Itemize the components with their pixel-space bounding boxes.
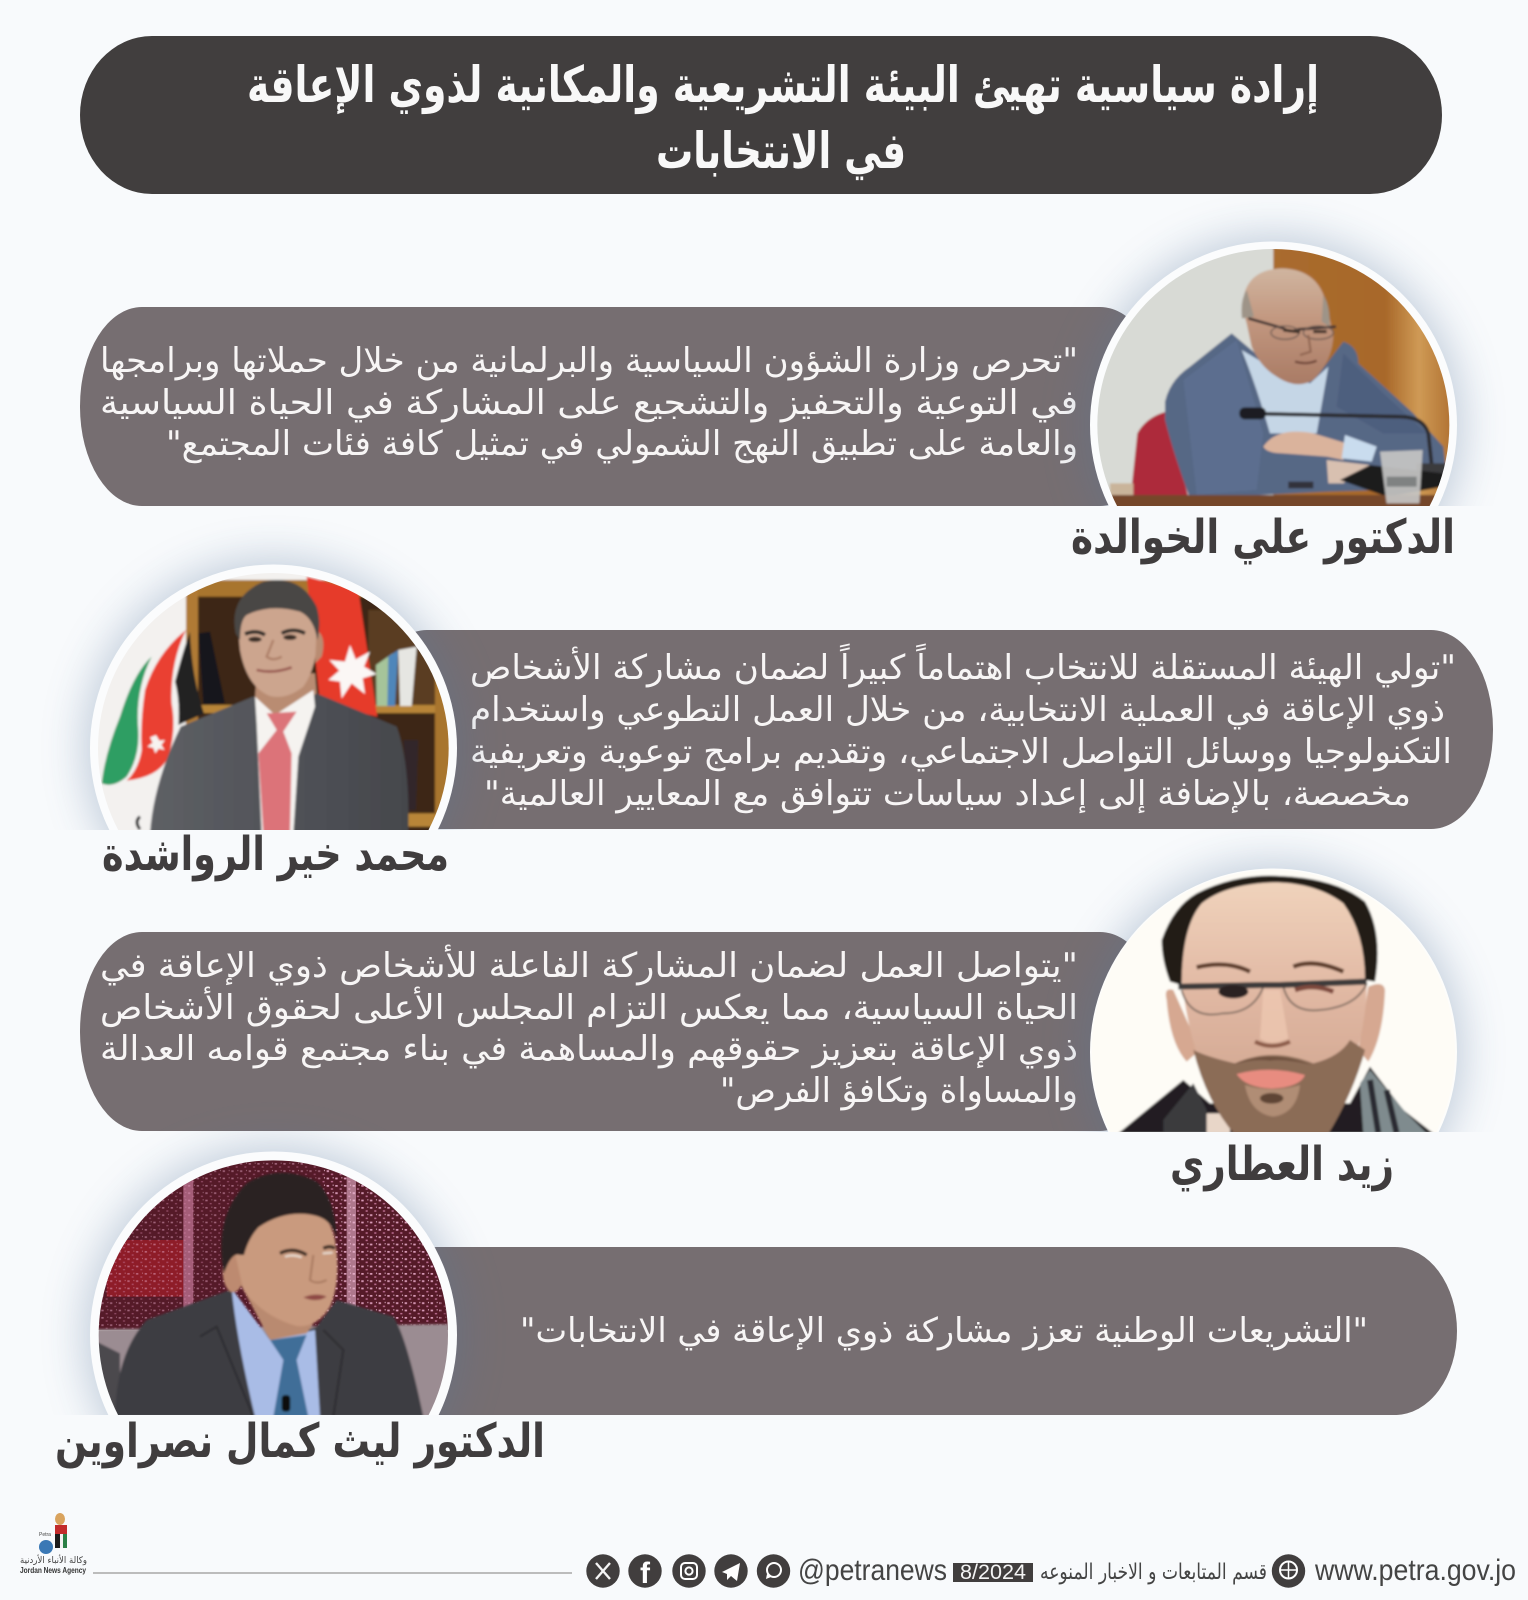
logo: Petra Jordan News Agency: وكالة الأنباء الأردنية [20, 1554, 87, 1566]
name 2: محمد خير الرواشدة [102, 827, 449, 882]
logo: Petra Jordan News Agency: Petra [39, 1532, 51, 1538]
icon: WhatsApp [757, 1554, 790, 1588]
quote text 1: "تحرص وزارة الشؤون السياسية والبرلمانية من خلال حملاتها وبرامجها [100, 341, 1078, 381]
footer rule [93, 1572, 572, 1574]
quote text 1: في التوعية والتحفيز والتشجيع على المشاركة في الحياة السياسية [100, 383, 1078, 423]
quote text 4: "التشريعات الوطنية تعزز مشاركة ذوي الإعاقة في الانتخابات" [520, 1311, 1368, 1351]
quote text 2: مخصصة، بالإضافة إلى إعداد سياسات تتوافق مع المعايير العالمية" [484, 774, 1411, 814]
quote text 3: الحياة السياسية، مما يعكس التزام المجلس الأعلى لحقوق الأشخاص [100, 986, 1078, 1028]
quote bubble 4 [375, 1247, 1457, 1415]
logo: Petra Jordan News Agency: Jordan News Agency [20, 1566, 86, 1575]
social handle: @petranews [798, 1554, 947, 1587]
title text [247, 56, 1319, 180]
panel: quote Mohammad Khair Rawashdeh [86, 560, 1493, 936]
date badge: 8/2024 [960, 1561, 1026, 1584]
quote bubble 2 [365, 630, 1493, 829]
panel: quote Laith Nasrawin [57, 1131, 1457, 1468]
quote text 2: ذوي الإعاقة في العملية الانتخابية، من خلال العمل التطوعي واستخدام [470, 690, 1445, 730]
panel: quote Zaid Al-Attari [80, 864, 1463, 1240]
icon: Facebook [628, 1554, 662, 1590]
footer [20, 1513, 1516, 1590]
quote text 3: "يتواصل العمل لضمان المشاركة الفاعلة للأشخاص ذوي الإعاقة في [100, 944, 1078, 986]
portrait 2 [64, 538, 484, 830]
quote text 2: التكنولوجيا ووسائل التواصل الاجتماعي، وتقديم برامج توعوية وتعريفية [470, 732, 1452, 772]
quote text 1: والعامة على تطبيق النهج الشمولي في تمثيل كافة فئات المجتمع" [166, 424, 1078, 464]
quote text 1 [100, 341, 1078, 464]
logo: Petra Jordan News Agency [20, 1513, 87, 1575]
icon: globe [1272, 1554, 1305, 1588]
name 3: زيد العطاري [1170, 1137, 1394, 1192]
title text: في الانتخابات [656, 122, 906, 180]
portrait 3 [1064, 842, 1484, 1132]
quote text 2 [470, 643, 1456, 814]
name 4: الدكتور ليث كمال نصراوين [55, 1414, 545, 1469]
icon: Instagram [672, 1554, 706, 1588]
portrait 1 [1064, 215, 1484, 506]
department label: قسم المتابعات و الاخبار المنوعه [1040, 1560, 1267, 1585]
title banner [80, 36, 1442, 194]
icon: X [586, 1554, 620, 1588]
icon: Facebook: f [640, 1557, 651, 1590]
quote bubble 3 [80, 932, 1162, 1131]
quote text 2: "تولي الهيئة المستقلة للانتخاب اهتماماً كبيراً لضمان مشاركة الأشخاص [470, 643, 1456, 688]
quote text 3: ذوي الإعاقة بتعزيز حقوقهم والمساهمة في بناء مجتمع قوامه العدالة [100, 1029, 1078, 1069]
title background pill [80, 36, 1442, 194]
quote bubble 1 [80, 307, 1162, 506]
quote text 3: والمساواة وتكافؤ الفرص" [720, 1071, 1078, 1111]
panel: quote Ali Khawaldeh [80, 237, 1470, 613]
icon: Telegram [714, 1554, 748, 1588]
quote text 3 [100, 944, 1078, 1111]
portrait 4 [64, 1131, 464, 1415]
